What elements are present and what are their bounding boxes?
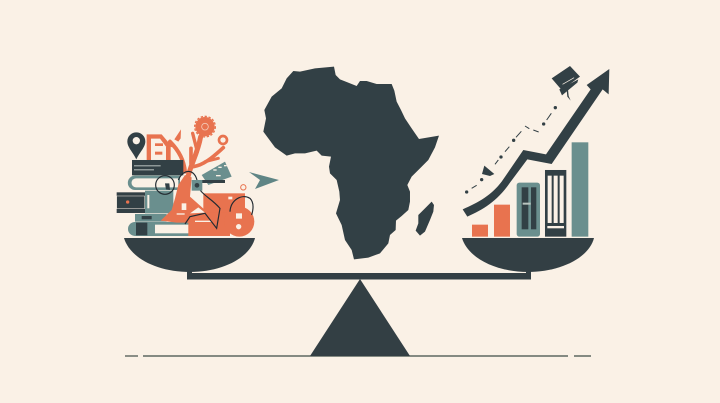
location pin [127, 132, 145, 159]
small rocket [482, 166, 494, 176]
teal rounded book [128, 176, 180, 190]
sprig [174, 129, 181, 142]
scale fulcrum [310, 279, 410, 356]
orange bar small [472, 225, 488, 237]
small ring [241, 185, 246, 190]
gear flower [195, 116, 215, 137]
laptop [117, 191, 173, 213]
right bars and growth arrow [463, 66, 609, 237]
small book [135, 214, 167, 222]
orange document [147, 134, 171, 160]
keyhole [165, 183, 170, 190]
Madagascar [416, 202, 434, 236]
left pan [124, 238, 255, 272]
teal tall bar [572, 142, 588, 237]
graduation cap [552, 66, 580, 101]
bottom teal book [128, 222, 190, 236]
round orange bag [224, 207, 254, 237]
dark top book [132, 160, 183, 175]
teal tag [200, 162, 232, 185]
teal bar rounded [517, 183, 540, 237]
map of Africa [263, 67, 439, 259]
black line loops [156, 171, 253, 228]
ground line [125, 355, 591, 357]
left pile: education and resources [117, 116, 254, 237]
scale beam [187, 270, 531, 280]
gear joint [192, 180, 202, 191]
small flower [219, 136, 227, 144]
orange bar medium [494, 205, 510, 237]
orange folder stack [161, 175, 245, 236]
right pan [462, 238, 594, 272]
dashed dotted trajectory [472, 113, 551, 188]
growth arrow [463, 69, 609, 217]
dark striped bar [545, 170, 566, 237]
arrow pointing to Africa [249, 172, 279, 189]
plant branches [167, 133, 223, 180]
